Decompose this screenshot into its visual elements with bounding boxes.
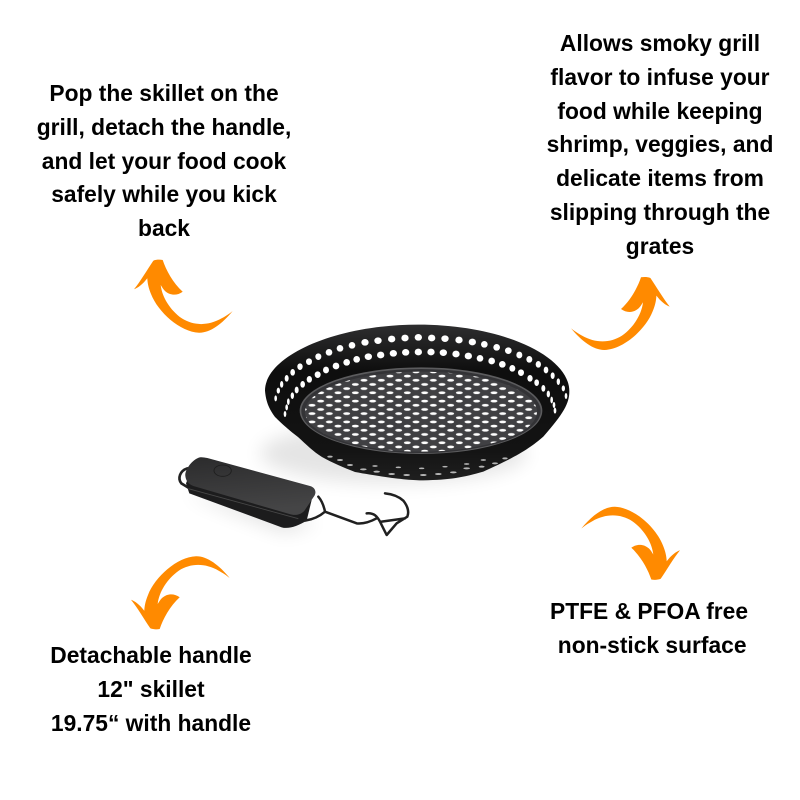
- handle wire: loop around the grip: [179, 468, 190, 489]
- handle shadow: [183, 493, 317, 533]
- arrow: bottom left, pointing down to the handle details: [131, 556, 230, 629]
- handle grip: [185, 457, 315, 515]
- front wall holes: [327, 456, 508, 476]
- text block: handle and size details: Detachable handle 12" skillet 19.75“ with handle: [50, 642, 252, 736]
- arrow: top left, pointing up to the grill instructions: [134, 260, 233, 333]
- arrow: top right, pointing up to the smoky flavor text: [571, 277, 670, 350]
- product photo: detachable handle: [179, 457, 408, 535]
- pan shadow: [260, 423, 527, 483]
- product photo: perforated skillet: [260, 325, 569, 483]
- arrow: bottom right, pointing down to the non-stick text: [581, 507, 680, 580]
- rim holes: two rows around the back wall: [274, 334, 567, 417]
- pan floor: [300, 367, 542, 454]
- handle grip base: [186, 473, 312, 528]
- handle wire: hook end: [305, 493, 408, 535]
- handle logo: [214, 465, 231, 476]
- text block: grill instructions: Pop the skillet on the grill, detach the handle, and let your food cook safely while you kick back: [37, 80, 291, 241]
- handle base highlight: [188, 489, 298, 519]
- text block: smoky flavor benefit: Allows smoky grill flavor to infuse your food while keeping shrimp, veggies, and delicate items from slipping through the grates: [547, 30, 773, 259]
- pan body: [265, 325, 569, 480]
- text block: non-stick surface: PTFE & PFOA free non-stick surface: [550, 598, 748, 658]
